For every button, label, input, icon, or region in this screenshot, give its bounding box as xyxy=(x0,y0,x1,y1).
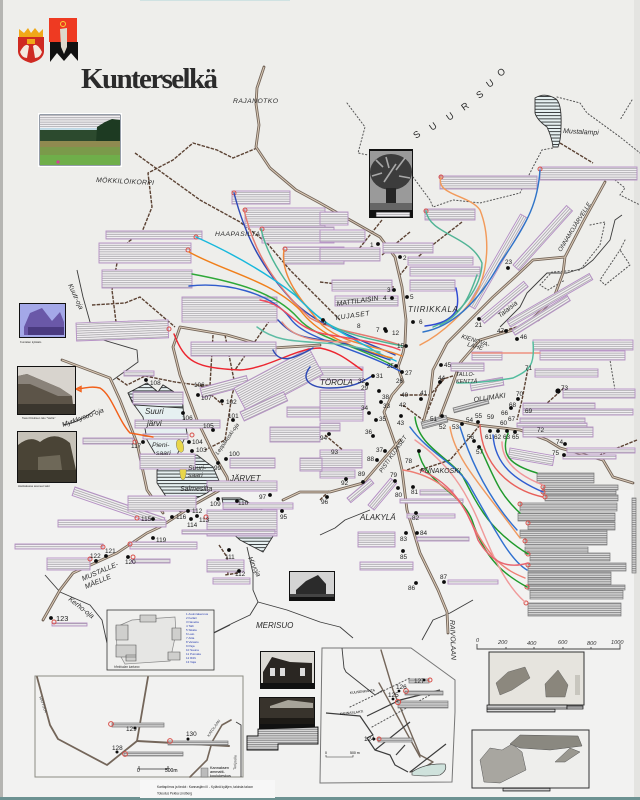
place names: Suuri xyxy=(145,407,164,416)
floor plan with legend: 5 Sikala xyxy=(186,628,197,632)
scale bar: 600 xyxy=(558,640,568,646)
numbered farm markers: 27 xyxy=(405,370,413,377)
numbered farm markers: 41 xyxy=(420,390,428,397)
numbered farm markers: 84 xyxy=(420,530,428,537)
photo: group at farmhouse with caption xyxy=(247,697,318,750)
text boxes: west rotated labels xyxy=(58,327,323,536)
place names: MÖKKILÖIKORPI xyxy=(96,176,154,187)
numbered farm markers: 82 xyxy=(412,515,420,522)
scale bar: 800 xyxy=(587,641,597,647)
numbered farm markers: 3 xyxy=(387,287,391,294)
place names: MÄELLE xyxy=(84,573,113,591)
connector lines: south-east bundle xyxy=(403,417,543,602)
numbered farm markers: 57 xyxy=(476,449,484,456)
dashed tracks xyxy=(92,143,637,575)
inset map: river area xyxy=(320,648,455,783)
numbered farm markers: 110 xyxy=(238,500,249,507)
numbered farm markers: 122 xyxy=(90,553,101,560)
floor plan with legend: 2 Kellari xyxy=(186,616,197,620)
numbered farm markers: 72 xyxy=(537,427,545,434)
numbered farm markers: 121 xyxy=(105,548,116,555)
inset map: river area: KUUSENKANTA xyxy=(350,688,376,695)
numbered farm markers: 68 xyxy=(509,402,517,409)
numbered farm markers: 103 xyxy=(196,447,207,454)
inset map: river area: 124 xyxy=(364,736,375,743)
place names: MUSTALLE- xyxy=(81,561,120,583)
numbered farm markers: 88 xyxy=(367,456,375,463)
lake: southern pond xyxy=(222,498,275,552)
numbered farm markers: 6 xyxy=(419,319,423,326)
numbered farm markers: 29 xyxy=(361,385,369,392)
numbered farm markers: 35 xyxy=(379,416,387,423)
numbered farm markers: 74 xyxy=(556,439,564,446)
place names: LAHE xyxy=(466,341,485,352)
place names: HAAPASILTA xyxy=(215,231,260,238)
numbered farm markers: 2 xyxy=(403,255,407,262)
numbered farm markers: 104 xyxy=(192,439,203,446)
numbered farm markers: 65 xyxy=(512,434,520,441)
place names: KUJASET xyxy=(335,310,371,322)
icon: coat of arms xyxy=(18,28,44,63)
place names: RAJANOTKO xyxy=(233,98,279,105)
floor plan with legend: 11 Puimala xyxy=(186,652,201,656)
numbered farm markers: 51 xyxy=(430,416,438,423)
lake hatching: Suuri järvi north xyxy=(128,383,183,408)
inset map: Kannakkala: HATTULA xyxy=(38,696,48,714)
numbered farm markers: 54 xyxy=(466,417,474,424)
dotted swamp borders xyxy=(347,97,640,390)
connector lines: north-west bundle xyxy=(76,193,402,437)
place names: Mustalampi xyxy=(563,128,599,137)
floor plan with legend: 1 Asuinrakennus xyxy=(186,612,209,616)
numbered farm markers: 66 xyxy=(501,410,509,417)
photo: landscape with text panel xyxy=(38,113,122,167)
place names xyxy=(61,98,599,661)
inset map: Kannakkala: 129 xyxy=(126,726,137,733)
inset map: Kannakkala: ammatti- xyxy=(210,770,226,774)
floor plan with legend: 4 Talli xyxy=(186,624,194,628)
numbered farm markers: 4 xyxy=(383,295,387,302)
floor plan with legend: 13 Vaja xyxy=(186,660,196,664)
numbered farm markers: 69 xyxy=(525,408,533,415)
numbered farm markers: 32 xyxy=(358,378,366,385)
numbered farm markers: 55 xyxy=(475,413,483,420)
place names: RAIVOLAAN xyxy=(448,620,456,661)
place names: TALLO- xyxy=(456,372,475,378)
floor plan with legend: 6 Lato xyxy=(186,632,195,636)
swamp name: Suursuo: U xyxy=(444,110,456,123)
numbered farm markers: 25 xyxy=(387,363,395,370)
footer credit: Toteutus Pekka Lindberg xyxy=(157,792,192,796)
numbered farm markers: 52 xyxy=(439,424,447,431)
place names: Pieni- xyxy=(152,442,170,449)
swamp name: Suursuo: U xyxy=(427,120,439,133)
numbered farm markers: 106 xyxy=(194,382,205,389)
numbered farm markers: 47 xyxy=(497,328,505,335)
numbered farm markers: 79 xyxy=(390,472,398,479)
swamp name: Suursuo: S xyxy=(411,129,423,141)
island: Suuri-saari xyxy=(180,462,186,480)
numbered farm markers: 80 xyxy=(395,492,403,499)
text boxes: south labels xyxy=(358,490,498,584)
numbered farm markers: 95 xyxy=(280,514,288,521)
numbered farm markers: 92 xyxy=(341,480,349,487)
place names: ALAKYLÄ xyxy=(359,513,396,522)
numbered farm markers: 12 xyxy=(392,330,400,337)
numbered farm markers: 102 xyxy=(226,399,237,406)
line from plan to stream xyxy=(214,625,230,633)
numbered farm markers: 87 xyxy=(440,574,448,581)
numbered farm markers: 86 xyxy=(408,585,416,592)
title: Kunterselkä xyxy=(81,63,218,95)
numbered farm markers: 83 xyxy=(400,536,408,543)
numbered farm markers: 75 xyxy=(552,450,560,457)
floor plan with legend: 12 Riihi xyxy=(186,656,196,660)
lake: Mustalampi xyxy=(535,95,561,147)
place names: PUNAKOSKI xyxy=(420,468,461,475)
numbered farm markers: 33 xyxy=(383,403,391,410)
place names: Kuutr-oja xyxy=(66,283,84,311)
inset map: Kannakkala: 130 xyxy=(186,731,197,738)
inset map: river area: 125 xyxy=(388,692,399,699)
place names: TIIRIKKALA xyxy=(408,305,458,314)
numbered farm markers: 108 xyxy=(150,380,161,387)
drawing: farm buildings xyxy=(487,652,584,712)
numbered farm markers: 100 xyxy=(229,451,240,458)
numbered farm markers: 94 xyxy=(320,435,328,442)
inset map: Kannakkala: Terijoelle xyxy=(233,755,238,770)
place names: Leppäkoski-oja xyxy=(215,422,241,456)
numbered farm markers xyxy=(49,242,569,623)
place names: MATTILAISIN xyxy=(336,295,379,308)
photo: large tree xyxy=(369,149,413,218)
numbered farm markers: 116 xyxy=(176,514,187,521)
numbered farm markers: 61 xyxy=(485,434,493,441)
numbered farm markers: 7 xyxy=(376,327,380,334)
numbered farm markers: 99 xyxy=(214,465,222,472)
streams xyxy=(45,215,622,643)
numbered farm markers: 112 xyxy=(235,571,246,578)
drawing: manor courtyard xyxy=(472,730,589,791)
photo: log house xyxy=(17,366,76,420)
footer credit: Karttapiirros ja tiedot : Kannasjärvi II - Kylänä kyläjen, taloista taloon xyxy=(157,785,253,789)
numbered farm markers: 115 xyxy=(141,516,152,523)
photo: small house xyxy=(289,571,335,601)
island: Pieni-saari xyxy=(175,439,185,453)
floor plan with legend xyxy=(107,610,214,670)
inset map: river area: 0 xyxy=(325,751,327,755)
swamp name: Suursuo: O xyxy=(495,66,508,79)
inset map: Kannakkala xyxy=(35,676,243,778)
numbered farm markers: 107 xyxy=(201,395,212,402)
numbered farm markers: 105 xyxy=(203,423,214,430)
numbered farm markers: 1 xyxy=(370,242,374,249)
place names: KENTTÄ xyxy=(456,378,478,385)
numbered farm markers: 112 xyxy=(192,508,203,515)
numbered farm markers: 34 xyxy=(361,405,369,412)
scale bar: 0 xyxy=(476,638,480,644)
floor plan with legend: Hiekkalan kartano xyxy=(114,665,140,669)
numbered farm markers: 73 xyxy=(561,385,569,392)
numbered farm markers: 123 xyxy=(56,614,68,623)
numbered farm markers: 114 xyxy=(187,522,198,529)
numbered farm markers: 85 xyxy=(400,554,408,561)
floor plan with legend: 9 Paja xyxy=(186,644,195,648)
place names: Suuri- xyxy=(188,465,207,472)
scale bar: 1000 xyxy=(611,640,624,646)
numbered farm markers: 63 xyxy=(503,434,511,441)
swamp name: Suursuo: S xyxy=(474,89,486,101)
scale bar: 400 xyxy=(527,641,537,647)
place names: saari xyxy=(156,450,171,457)
place names: KIENOVA- xyxy=(460,333,490,349)
place names: ONNAMOJÄRVELLE xyxy=(557,200,593,253)
numbered farm markers: 89 xyxy=(358,471,366,478)
numbered farm markers: 5 xyxy=(410,294,414,301)
numbered farm markers: 113 xyxy=(199,517,210,524)
connector lines: north-east bundle xyxy=(420,170,540,383)
numbered farm markers: 26 xyxy=(396,378,404,385)
photo: wooden villa xyxy=(260,651,315,689)
photo: purple house: Kuntalan kylätalo xyxy=(20,340,42,344)
numbered farm markers: 106 xyxy=(182,415,193,422)
numbered farm markers: 37 xyxy=(376,447,384,454)
place names: TÖROLA xyxy=(320,378,353,387)
numbered farm markers: 117 xyxy=(131,443,142,450)
photo: purple house xyxy=(19,303,66,344)
text boxes: south-west labels xyxy=(15,542,250,626)
numbered farm markers: 120 xyxy=(125,559,136,566)
inset map: river area: 126 xyxy=(396,684,407,691)
icon: parish banner xyxy=(49,18,78,62)
numbered farm markers: 23 xyxy=(505,259,513,266)
numbered farm markers: 43 xyxy=(397,420,405,427)
numbered farm markers: 31 xyxy=(376,373,384,380)
swamp name: Suursuo xyxy=(411,66,508,141)
place names: Kerho-oja xyxy=(67,596,95,620)
roads xyxy=(43,67,633,633)
numbered farm markers: 9 xyxy=(323,320,327,327)
numbered farm markers: 53 xyxy=(452,424,460,431)
numbered farm markers: 8 xyxy=(357,323,361,330)
numbered farm markers: 101 xyxy=(228,413,239,420)
photo: barn among trees xyxy=(17,431,77,488)
numbered farm markers: 109 xyxy=(210,501,221,508)
inset map: Kannakkala: koulukeskus xyxy=(210,774,231,778)
inset map: Kannakkala: 128 xyxy=(112,745,123,752)
numbered farm markers: 56 xyxy=(467,434,475,441)
place names: JÄRVET xyxy=(229,474,262,483)
floor plan with legend: 3 Navetta xyxy=(186,620,199,624)
orange arrow to house photo xyxy=(76,386,153,437)
floor plan with legend: 7 Aitta xyxy=(186,636,195,640)
inset map: river area: KANNASLAHTI xyxy=(340,710,364,716)
numbered farm markers: 93 xyxy=(331,449,339,456)
numbered farm markers: 111 xyxy=(225,554,235,561)
text boxes: east labels xyxy=(508,340,636,616)
inset map: Kannakkala: Kannaksen xyxy=(210,766,229,770)
scale bar: 200 xyxy=(497,640,508,646)
numbered farm markers: 119 xyxy=(156,537,167,544)
numbered farm markers: 81 xyxy=(411,489,419,496)
place names: Hirvoja xyxy=(246,556,262,578)
place names: saari xyxy=(188,472,203,479)
inset map: river area: 500 m xyxy=(350,751,360,755)
place names: OLLIMÄKI xyxy=(473,392,506,404)
footer credit xyxy=(140,780,275,798)
numbered farm markers: 97 xyxy=(259,494,267,501)
inset map: Kannakkala: 500m xyxy=(165,768,178,774)
numbered farm markers: 15 xyxy=(397,343,405,350)
place names: järvi xyxy=(146,419,162,428)
photo: log house: Taavi Kiiskisen talo "Varila" xyxy=(22,416,55,420)
inset map: river area: 127 xyxy=(414,678,425,685)
inset map: Kannakkala: KATOLAAN xyxy=(207,719,221,738)
numbered farm markers: 96 xyxy=(321,499,329,506)
numbered farm markers: 21 xyxy=(475,322,483,329)
lake: Salmesilta xyxy=(157,455,220,513)
numbered farm markers: 70 xyxy=(516,391,524,398)
numbered farm markers: 40 xyxy=(401,392,409,399)
numbered farm markers: 42 xyxy=(399,402,407,409)
numbered farm markers: 62 xyxy=(494,434,502,441)
scale bar xyxy=(476,638,624,649)
swamp name: Suursuo: U xyxy=(484,77,496,90)
place names: PISTI KUJASET xyxy=(379,434,409,474)
numbered farm markers: 38 xyxy=(382,394,390,401)
inset map: Kannakkala: 0 xyxy=(137,768,140,774)
numbered farm markers: 67 xyxy=(508,416,516,423)
numbered farm markers: 78 xyxy=(405,458,413,465)
swamp name: Suursuo: R xyxy=(459,100,471,113)
numbered farm markers: 36 xyxy=(365,429,373,436)
numbered farm markers: 59 xyxy=(487,414,495,421)
photo: barn among trees: Hiekkalassa asuneet talot xyxy=(18,484,50,488)
floor plan with legend: 8 Varasto xyxy=(186,640,199,644)
numbered farm markers: 44 xyxy=(438,375,446,382)
numbered farm markers: 46 xyxy=(520,334,528,341)
place names: Myrkkysuo-oja xyxy=(61,407,105,429)
numbered farm markers: 71 xyxy=(525,365,533,372)
text boxes: north and centre labels xyxy=(76,167,637,510)
place names: Talaisia xyxy=(497,300,519,320)
place names: MERISUO xyxy=(256,621,293,630)
numbered farm markers: 60 xyxy=(500,420,508,427)
numbered farm markers: 45 xyxy=(444,362,452,369)
place names: Salmesilta xyxy=(180,486,212,493)
floor plan with legend: 10 Sauna xyxy=(186,648,199,652)
lake: Suuri järvi xyxy=(128,383,187,457)
